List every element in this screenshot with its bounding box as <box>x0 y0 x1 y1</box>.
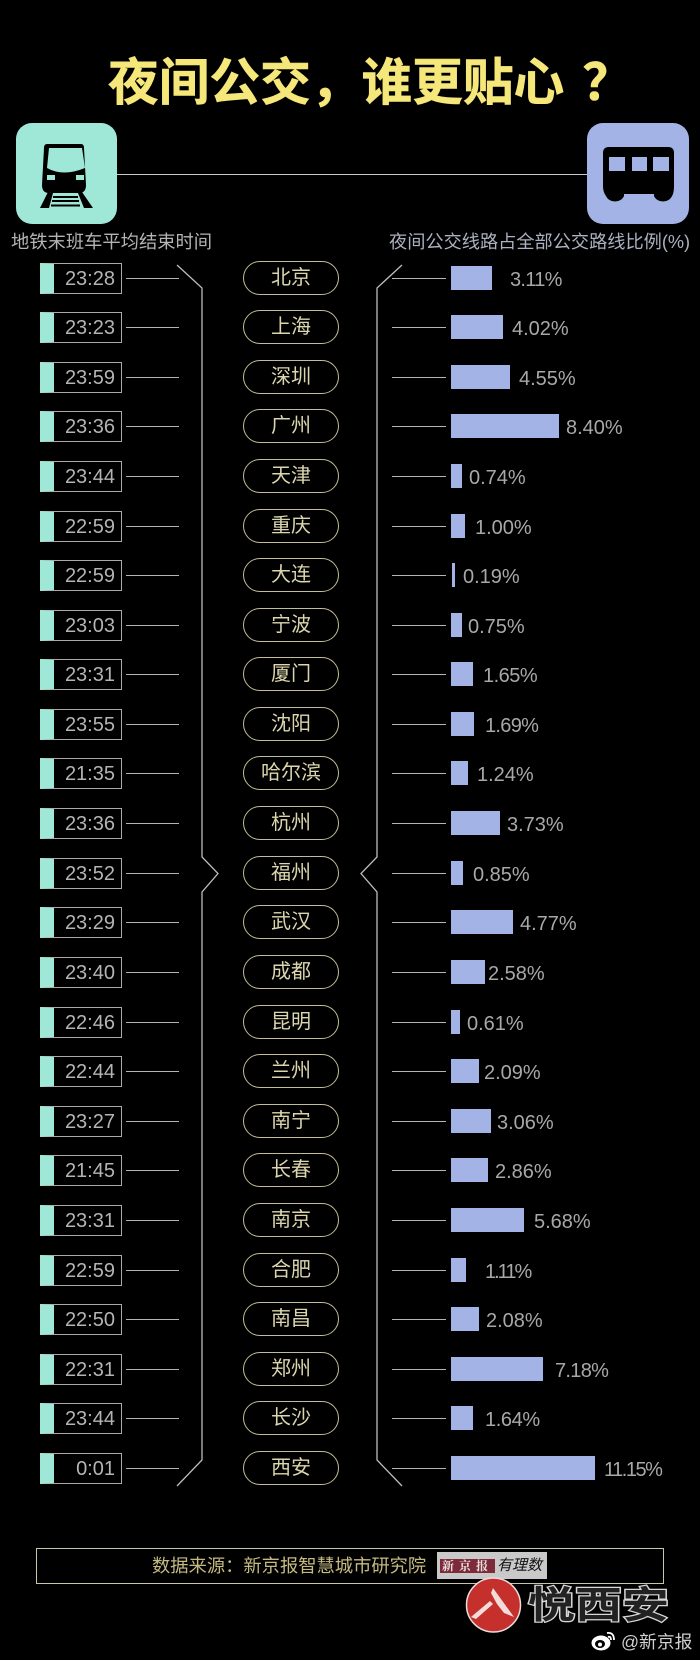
row: 长春: 21:45 <box>65 1160 115 1182</box>
row: 西安 <box>40 1451 662 1485</box>
row: 重庆: 1.00% <box>475 517 532 539</box>
source text: 数据来源：新京报智慧城市研究院 <box>152 1555 426 1576</box>
row: 杭州: 3.73% <box>507 814 564 836</box>
watermark text: @新京报 <box>621 1632 692 1652</box>
row: 西安: 11.15% <box>604 1459 661 1481</box>
row: 成都 <box>40 955 545 989</box>
icon: subway train <box>16 123 117 224</box>
row: 兰州: 兰州 <box>271 1060 311 1082</box>
row: 杭州: 杭州 <box>271 812 311 834</box>
row: 郑州: 郑州 <box>271 1358 311 1380</box>
row: 重庆: 重庆 <box>271 515 311 537</box>
row: 西安: 西安 <box>271 1457 311 1479</box>
row: 成都: 成都 <box>271 961 311 983</box>
row: 南昌 <box>40 1302 543 1336</box>
row: 上海: 上海 <box>271 316 311 338</box>
row: 武汉: 4.77% <box>520 913 577 935</box>
row: 重庆: 22:59 <box>65 516 115 538</box>
row: 宁波: 23:03 <box>65 615 115 637</box>
logo: red circle <box>466 1577 522 1633</box>
row: 哈尔滨: 哈尔滨 <box>261 762 321 784</box>
row: 广州: 8.40% <box>566 417 623 439</box>
row: 合肥 <box>40 1253 532 1287</box>
row: 长春 <box>40 1153 552 1187</box>
badge: 新京报有理数 <box>437 1552 547 1579</box>
row: 深圳: 23:59 <box>65 367 115 389</box>
row: 大连: 0.19% <box>463 566 520 588</box>
row: 宁波 <box>40 608 525 642</box>
row: 武汉: 武汉 <box>271 911 311 933</box>
row: 成都: 2.58% <box>488 963 545 985</box>
row: 昆明: 22:46 <box>65 1012 115 1034</box>
row: 合肥: 22:59 <box>65 1260 115 1282</box>
row: 南宁 <box>40 1104 554 1138</box>
row: 天津: 0.74% <box>469 467 526 489</box>
row: 广州: 23:36 <box>65 416 115 438</box>
row: 武汉: 23:29 <box>65 912 115 934</box>
row: 北京 <box>40 261 562 295</box>
row: 杭州 <box>40 806 564 840</box>
row: 北京: 3.11% <box>510 269 562 291</box>
row: 昆明: 昆明 <box>271 1011 311 1033</box>
row: 大连: 22:59 <box>65 565 115 587</box>
row: 大连: 大连 <box>271 564 311 586</box>
row: 南京: 5.68% <box>534 1211 591 1233</box>
row: 西安: 0:01 <box>76 1458 115 1480</box>
row: 郑州 <box>40 1352 608 1386</box>
right bracket <box>360 264 402 1486</box>
row: 郑州: 7.18% <box>555 1360 608 1382</box>
row: 厦门: 1.65% <box>483 665 537 687</box>
row: 深圳: 4.55% <box>519 368 576 390</box>
row: 南京: 23:31 <box>65 1210 115 1232</box>
row: 哈尔滨: 1.24% <box>477 764 534 786</box>
row: 南宁: 3.06% <box>497 1112 554 1134</box>
row: 南京 <box>40 1203 591 1237</box>
row: 合肥: 1.11% <box>485 1261 530 1283</box>
row: 沈阳 <box>40 707 538 741</box>
row: 南京: 南京 <box>271 1209 311 1231</box>
row: 天津 <box>40 459 526 493</box>
left bracket <box>176 264 219 1486</box>
row: 南宁: 南宁 <box>271 1110 311 1132</box>
row: 哈尔滨 <box>40 756 534 790</box>
row: 兰州: 2.09% <box>484 1062 541 1084</box>
row: 厦门: 厦门 <box>271 663 311 685</box>
row: 深圳 <box>40 360 576 394</box>
row: 武汉 <box>40 905 577 939</box>
row: 沈阳: 1.69% <box>485 715 538 737</box>
row: 南宁: 23:27 <box>65 1111 115 1133</box>
row: 长沙: 1.64% <box>485 1409 540 1431</box>
row: 广州 <box>40 409 623 443</box>
title: 夜间公交，谁更贴心 ？ <box>108 54 633 111</box>
row: 福州: 福州 <box>271 862 311 884</box>
row: 深圳: 深圳 <box>271 366 311 388</box>
logo text: 悦西安 <box>528 1583 669 1626</box>
badge: 新京报有理数: 新京报 <box>442 1559 493 1573</box>
row: 南昌: 2.08% <box>486 1310 543 1332</box>
row: 北京: 23:28 <box>65 268 115 290</box>
row: 天津: 天津 <box>271 465 311 487</box>
row: 长春: 2.86% <box>495 1161 552 1183</box>
row: 北京: 北京 <box>271 267 311 289</box>
row: 兰州 <box>40 1054 541 1088</box>
row: 厦门 <box>40 657 537 691</box>
row: 杭州: 23:36 <box>65 813 115 835</box>
row: 长沙: 长沙 <box>271 1407 311 1429</box>
row: 福州: 23:52 <box>65 863 115 885</box>
row: 长沙 <box>40 1401 540 1435</box>
row: 长春: 长春 <box>271 1159 311 1181</box>
row: 厦门: 23:31 <box>65 664 115 686</box>
row: 郑州: 22:31 <box>65 1359 115 1381</box>
row: 哈尔滨: 21:35 <box>65 763 115 785</box>
row: 沈阳: 沈阳 <box>271 713 311 735</box>
row: 昆明 <box>40 1005 524 1039</box>
row: 福州 <box>40 856 530 890</box>
icon: bus <box>587 123 689 224</box>
subtitle: night bus share: 夜间公交线路占全部公交路线比例(%) <box>389 232 690 252</box>
row: 宁波: 0.75% <box>468 616 525 638</box>
row: 上海: 4.02% <box>512 318 569 340</box>
row: 合肥: 合肥 <box>271 1259 311 1281</box>
row: 上海 <box>40 310 569 344</box>
row: 长沙: 23:44 <box>65 1408 115 1430</box>
row: 兰州: 22:44 <box>65 1061 115 1083</box>
subtitle: subway last train: 地铁末班车平均结束时间 <box>11 231 212 252</box>
row: 昆明: 0.61% <box>467 1013 524 1035</box>
connector line between icons <box>116 174 588 175</box>
source panel <box>36 1548 664 1584</box>
row: 南昌: 南昌 <box>271 1308 311 1330</box>
row: 上海: 23:23 <box>65 317 115 339</box>
row: 沈阳: 23:55 <box>65 714 115 736</box>
row: 成都: 23:40 <box>65 962 115 984</box>
row: 天津: 23:44 <box>65 466 115 488</box>
row: 重庆 <box>40 509 532 543</box>
row: 南昌: 22:50 <box>65 1309 115 1331</box>
row: 大连 <box>40 558 520 592</box>
row: 宁波: 宁波 <box>271 614 311 636</box>
row: 广州: 广州 <box>271 415 311 437</box>
icon: weibo <box>592 1632 615 1650</box>
row: 福州: 0.85% <box>473 864 530 886</box>
badge: 新京报有理数: 有理数 <box>497 1557 542 1574</box>
